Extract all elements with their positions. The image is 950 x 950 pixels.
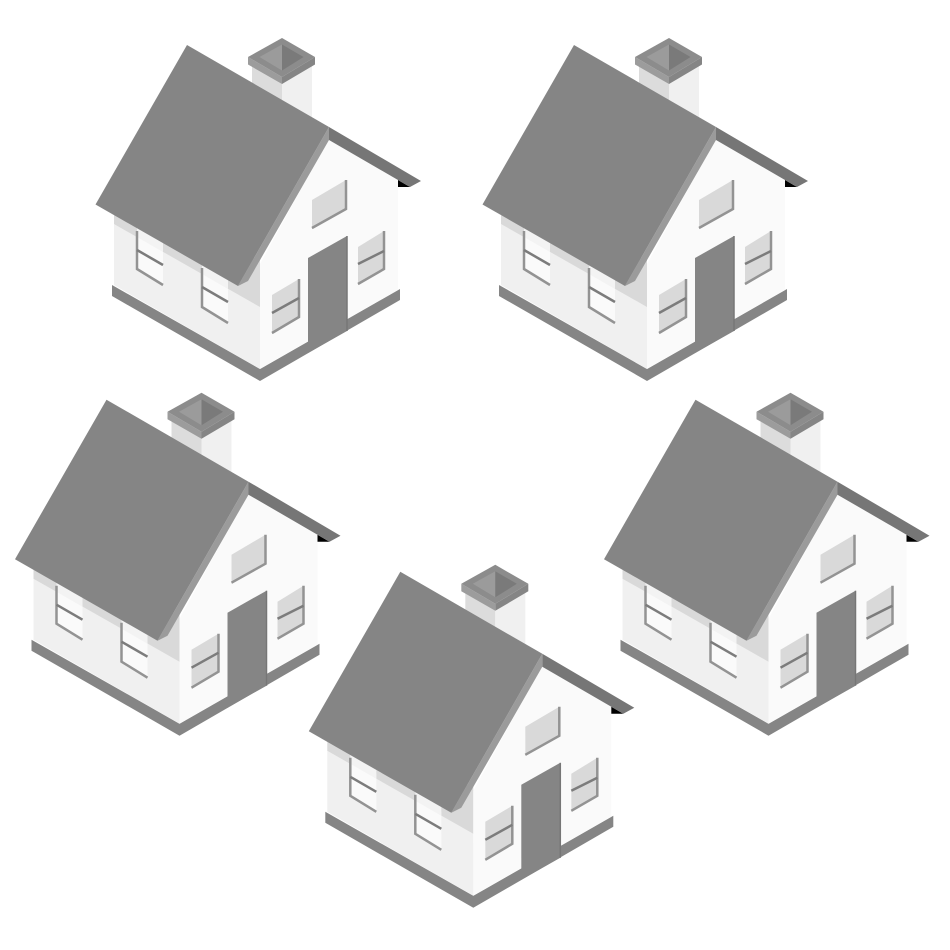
left wall: [114, 217, 260, 369]
front window: [272, 279, 299, 334]
roof shadow on left wall: [34, 570, 180, 662]
left wall: [34, 572, 180, 724]
roof shadow on left wall: [501, 215, 647, 307]
roof: [309, 572, 542, 813]
roof: [96, 45, 329, 286]
left wall: [501, 217, 647, 369]
chimney: [635, 38, 702, 118]
roof edge: [625, 127, 716, 286]
door: [816, 591, 856, 708]
front window: [780, 634, 808, 689]
left wall: [327, 744, 473, 896]
right window: [866, 586, 892, 640]
house: middle right: [604, 393, 930, 736]
left wall window one: [524, 225, 550, 285]
left wall: [622, 572, 768, 724]
foundation: [32, 640, 320, 736]
roof shadow on left wall: [622, 570, 768, 662]
left wall window two: [122, 617, 148, 678]
right wall: [768, 493, 906, 724]
roof shadow on left wall: [114, 215, 260, 307]
roof shadow on left wall: [327, 742, 473, 834]
foundation: [620, 640, 908, 736]
roof: [604, 400, 838, 641]
roof: [482, 45, 716, 286]
roof eave: [248, 482, 340, 542]
chimney: [756, 393, 824, 473]
chimney: [461, 565, 528, 645]
right window: [571, 758, 597, 812]
foundation: [112, 285, 400, 381]
door: [228, 591, 266, 708]
right window: [745, 231, 771, 285]
upper window: [232, 535, 266, 584]
left wall window one: [56, 580, 82, 640]
front window: [659, 279, 686, 334]
roof eave: [838, 482, 930, 542]
left wall window one: [137, 225, 163, 285]
front window: [485, 806, 512, 861]
roof edge: [158, 482, 248, 641]
door: [695, 236, 734, 353]
house: bottom centre: [309, 565, 634, 908]
roof edge: [451, 654, 542, 813]
roof eave: [716, 127, 808, 187]
right wall: [180, 493, 318, 724]
upper window: [312, 180, 346, 229]
right wall: [260, 138, 398, 369]
foundation: [499, 285, 787, 381]
door: [521, 763, 560, 880]
roof edge: [746, 482, 838, 641]
foundation: [325, 812, 613, 908]
house: top left: [96, 38, 421, 381]
roof eave: [329, 127, 421, 187]
right wall: [473, 665, 611, 896]
left wall window one: [646, 580, 672, 640]
left wall window two: [415, 789, 441, 850]
left wall window two: [710, 617, 736, 678]
house: middle left: [15, 393, 340, 736]
upper window: [525, 707, 559, 756]
right window: [358, 231, 384, 285]
upper window: [699, 180, 733, 229]
right window: [278, 586, 304, 640]
left wall window two: [202, 262, 228, 323]
roof eave: [542, 654, 634, 714]
front window: [192, 634, 218, 689]
chimney: [168, 393, 234, 473]
roof: [15, 400, 248, 641]
house: top right: [482, 38, 808, 381]
door: [308, 236, 347, 353]
chimney: [248, 38, 315, 118]
right wall: [647, 138, 785, 369]
left wall window two: [589, 262, 615, 323]
roof edge: [238, 127, 329, 286]
upper window: [820, 535, 854, 584]
left wall window one: [350, 752, 376, 812]
